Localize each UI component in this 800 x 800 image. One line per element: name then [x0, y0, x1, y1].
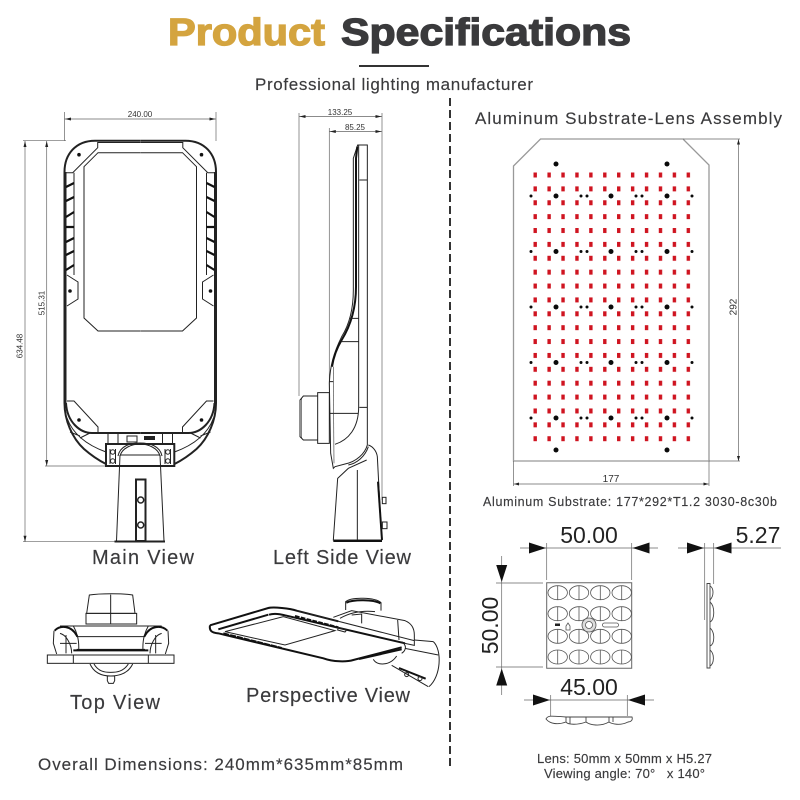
- side view dimensions: 85.25: [345, 123, 366, 132]
- substrate dimensions: 292: [728, 298, 740, 315]
- lens side view and dimension 5.27: [678, 522, 781, 668]
- lens pitch dimension 45.00: [524, 674, 654, 716]
- title: Specifications: [341, 12, 631, 54]
- lens pitch dimension 45.00: 45.00: [560, 674, 618, 700]
- lamp top view drawing: [47, 594, 174, 683]
- substrate board outline: [514, 139, 709, 461]
- substrate dimensions: [514, 139, 740, 486]
- label: top view: Top View: [70, 692, 161, 714]
- panel: lens module: [477, 522, 781, 781]
- side view dimensions: [299, 108, 382, 500]
- lens caption: Lens: 50mm x 50mm x H5.27: [537, 751, 712, 766]
- title underline: [359, 65, 429, 67]
- lens width dimension 50.00: 50.00: [560, 522, 618, 548]
- lens caption: [537, 751, 712, 781]
- main view dimensions: 515.31: [38, 290, 46, 315]
- label: perspective view: Perspective View: [246, 685, 411, 707]
- side view dimensions: 133.25: [328, 108, 353, 117]
- mounting bracket and post: [106, 436, 174, 542]
- lens width dimension 50.00: [520, 522, 658, 580]
- label: left side view: Left Side View: [273, 547, 412, 569]
- substrate caption: Aluminum Substrate: 177*292*T1.2 3030-8c30b: [483, 495, 777, 509]
- lens front view: [547, 583, 632, 668]
- panel: aluminum substrate: [483, 139, 777, 509]
- lens caption: Viewing angle: 70° x 140°: [544, 766, 705, 781]
- overall dimensions text: Overall Dimensions: 240mm*635mm*85mm: [38, 755, 403, 774]
- panel: main view: [16, 110, 216, 569]
- panel heading: substrate-lens assembly: Aluminum Substrate-Lens Assembly: [475, 109, 782, 128]
- title: Product: [168, 12, 325, 54]
- lens edge profile: [546, 716, 632, 725]
- lamp body side: [300, 145, 387, 541]
- lens side view and dimension 5.27: 5.27: [736, 522, 780, 548]
- black mounting holes: [530, 162, 694, 452]
- main view dimensions: 634.48: [16, 333, 24, 358]
- lens height dimension 50.00: [477, 556, 543, 695]
- panel: perspective view: [210, 598, 439, 707]
- main view dimensions: [16, 110, 216, 542]
- vertical dashed divider: [449, 98, 451, 770]
- panel: left side view: [273, 108, 412, 569]
- label: main view: Main View: [92, 547, 195, 569]
- lamp body front: [64, 141, 140, 464]
- subtitle: Professional lighting manufacturer: [255, 75, 533, 94]
- lens height dimension 50.00: 50.00: [477, 597, 503, 654]
- title: [168, 12, 631, 54]
- red LED grid: [534, 172, 690, 442]
- lamp perspective drawing: [210, 598, 439, 687]
- panel: top view: [47, 594, 174, 714]
- main view dimensions: 240.00: [128, 110, 153, 119]
- substrate dimensions: 177: [603, 474, 620, 485]
